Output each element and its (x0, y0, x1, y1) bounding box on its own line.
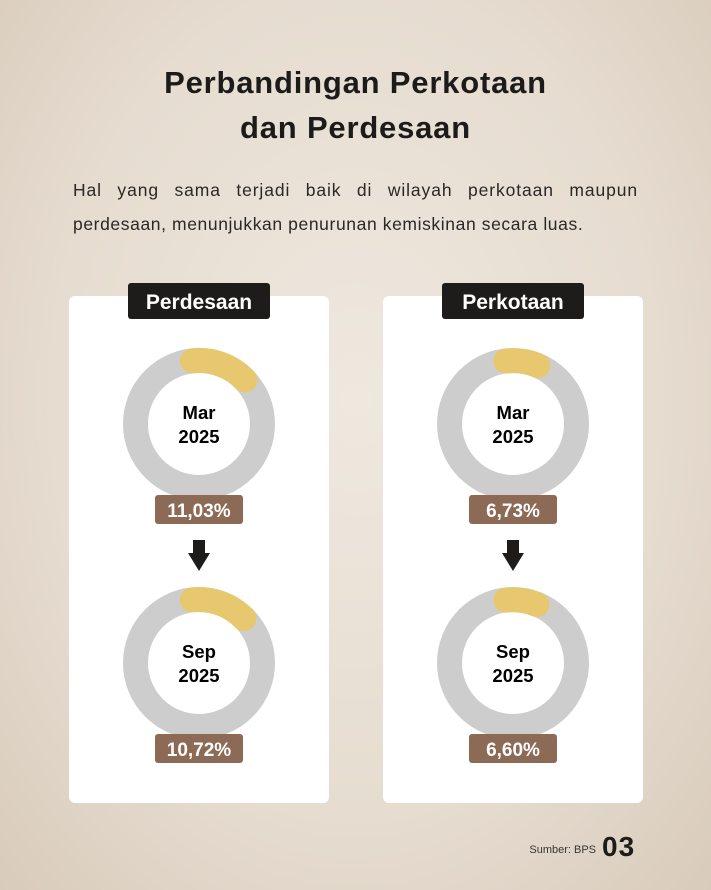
badge: 6,60% (469, 734, 557, 763)
intro text (73, 180, 638, 234)
intro text: Hal yang sama terjadi baik di wilayah perkotaan maupun (73, 180, 638, 200)
arrow down (502, 540, 524, 571)
label: perkotaan (442, 283, 584, 319)
donut: mar 2025 (450, 360, 576, 488)
title: Perbandingan Perkotaan (164, 65, 547, 100)
badge: 10,72% (155, 734, 243, 763)
donut: sep 2025: 2025 (178, 665, 220, 686)
donut: mar 2025: Mar (497, 402, 529, 423)
badge: 11,03%: 11,03% (167, 501, 231, 522)
badge: 10,72%: 10,72% (167, 740, 231, 761)
badge: 6,60%: 6,60% (486, 740, 540, 761)
intro text: perdesaan, menunjukkan penurunan kemiskinan secara luas. (73, 214, 583, 234)
title (164, 65, 547, 145)
panel: perdesaan (69, 283, 329, 803)
donut: sep 2025 (136, 599, 262, 726)
donut: sep 2025: Sep (182, 641, 216, 662)
panel: perkotaan (383, 283, 643, 803)
arrow down (188, 540, 210, 571)
title: dan Perdesaan (240, 110, 471, 145)
donut: mar 2025: 2025 (178, 426, 220, 447)
source: Sumber: BPS (529, 844, 596, 856)
donut: mar 2025 (136, 360, 262, 488)
badge: 11,03% (155, 495, 243, 524)
label: perdesaan (128, 283, 270, 319)
badge: 6,73% (469, 495, 557, 524)
donut: sep 2025: Sep (496, 641, 530, 662)
badge: 6,73%: 6,73% (486, 501, 540, 522)
donut: mar 2025: 2025 (492, 426, 534, 447)
donut: sep 2025: 2025 (492, 665, 534, 686)
donut: sep 2025 (450, 600, 576, 726)
label: perkotaan: Perkotaan (462, 291, 564, 314)
page number: 03 (602, 831, 635, 862)
label: perdesaan: Perdesaan (146, 291, 252, 314)
donut: mar 2025: Mar (183, 402, 215, 423)
